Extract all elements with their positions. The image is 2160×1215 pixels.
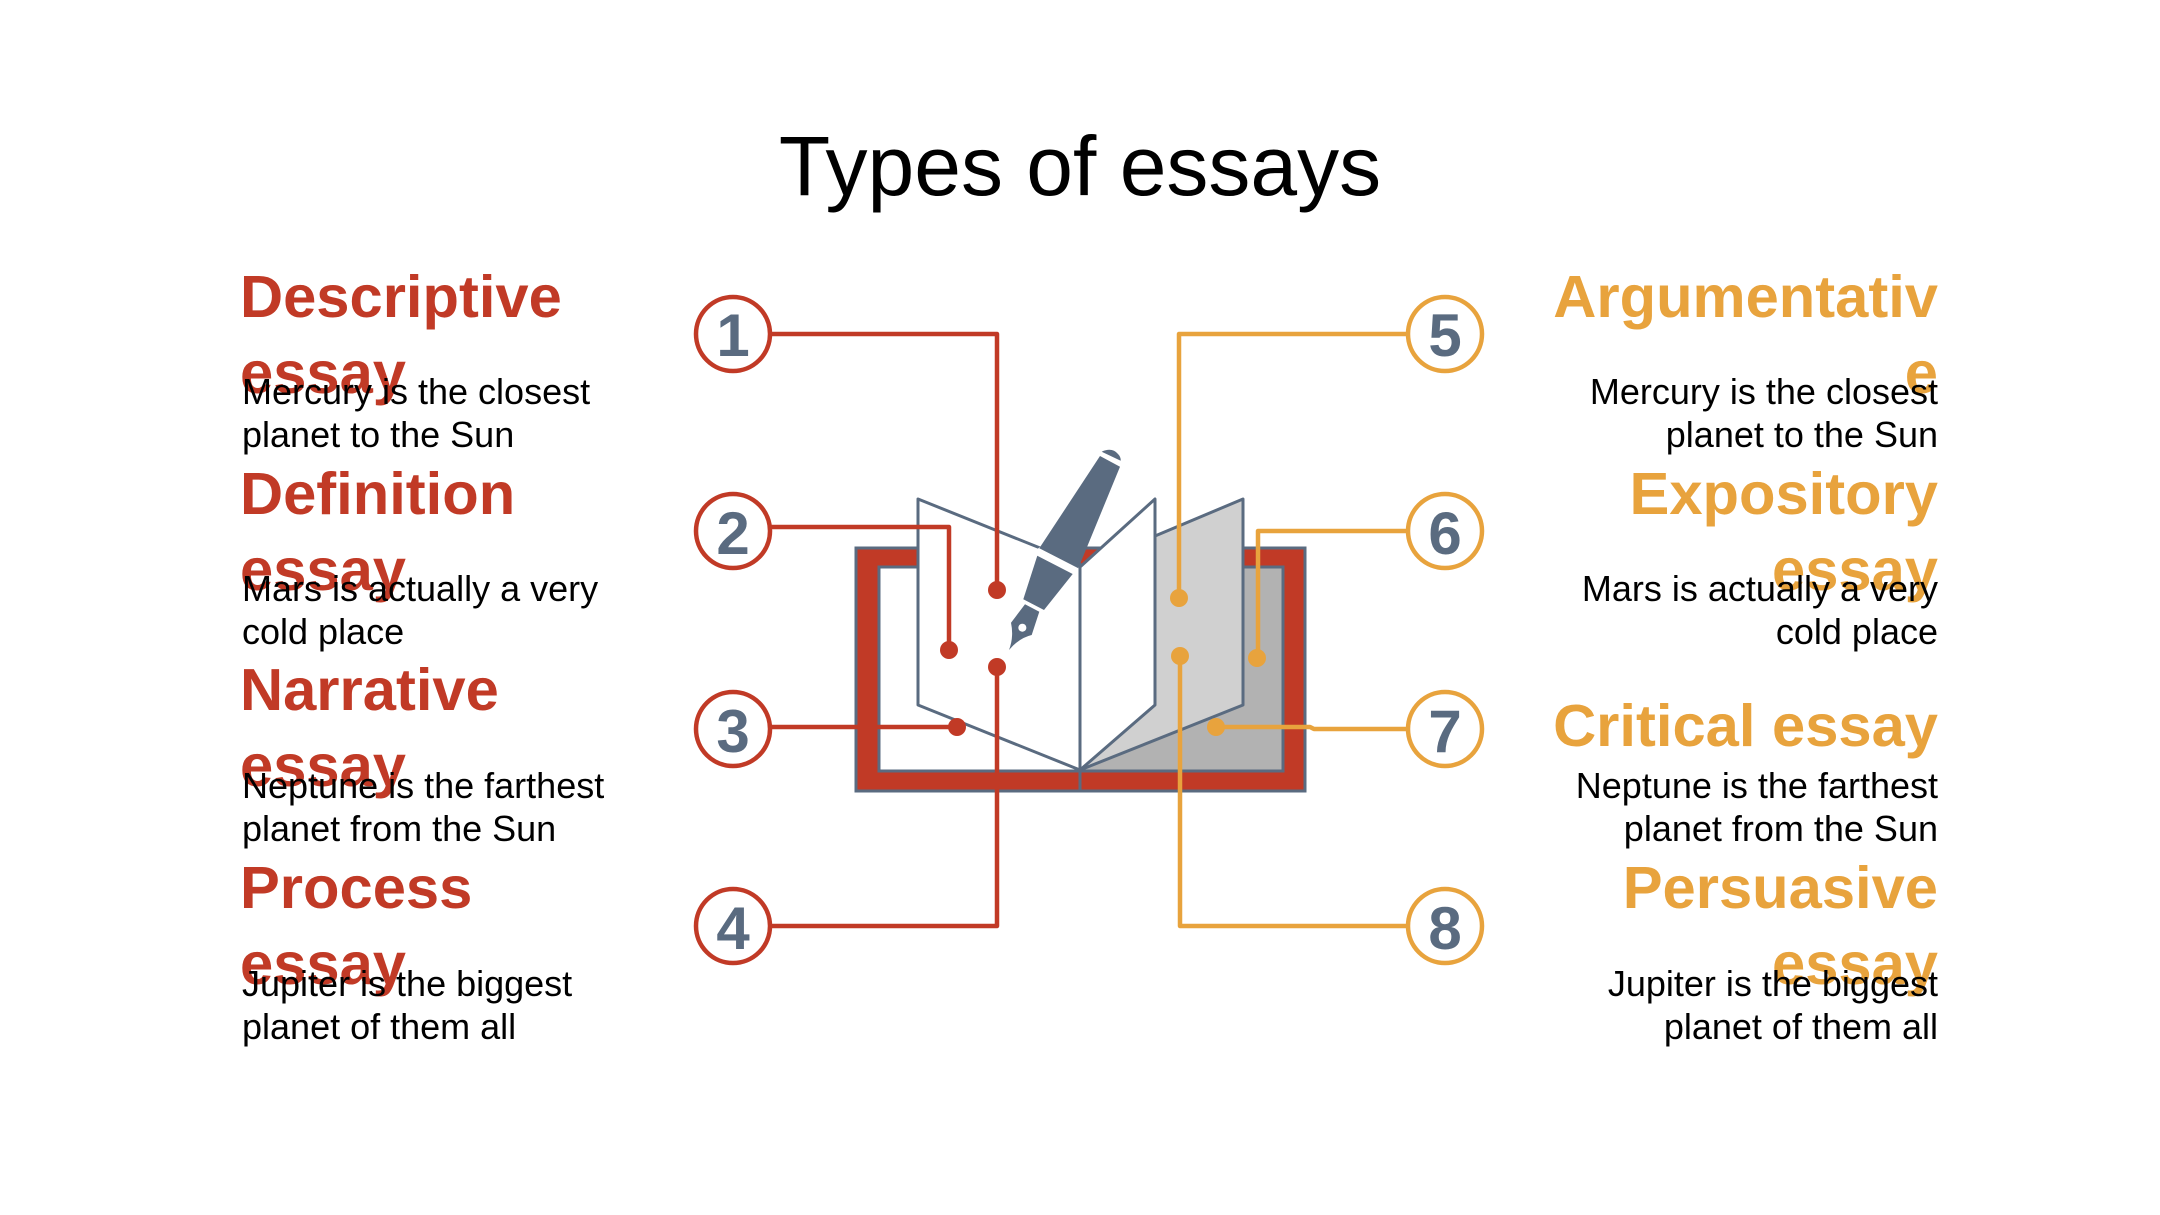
connector 8: [1171, 647, 1407, 926]
item: Persuasive essay: Jupiter is the biggest: [1608, 963, 1938, 1004]
left page: [918, 499, 1080, 770]
right page: [1080, 499, 1155, 770]
item: Narrative essay: planet from the Sun: [242, 808, 556, 849]
connectors: red: [771, 334, 1006, 926]
pen cap: [1102, 450, 1121, 461]
item: Process essay: Jupiter is the biggest: [242, 963, 572, 1004]
number badge 2: [696, 494, 770, 568]
item: Persuasive essay: [1608, 854, 1938, 1047]
number badge 6: [1408, 494, 1482, 568]
number badge 1: [696, 297, 770, 371]
illustration: open book with frame: [856, 499, 1305, 792]
number badge 6: 6: [1428, 500, 1462, 567]
number badge 3: [696, 692, 770, 766]
pen grip: [1023, 556, 1073, 610]
item: Critical essay: [1553, 692, 1938, 849]
number badge 4: [696, 889, 770, 963]
connector 6: [1248, 531, 1407, 667]
number badge 2: 2: [716, 500, 750, 567]
item: Narrative essay: Narrative: [240, 656, 499, 723]
item: Descriptive essay: Mercury is the closest: [242, 371, 590, 412]
item: Argumentative essay: Argumentativ: [1553, 263, 1938, 330]
item: Expository essay: cold place: [1776, 611, 1938, 652]
panel: right essay types: [1553, 263, 1938, 1047]
item: Argumentative essay: e: [1905, 339, 1938, 406]
item: Definition essay: cold place: [242, 611, 404, 652]
item: Narrative essay: Neptune is the farthest: [242, 765, 604, 806]
number badge 8: 8: [1428, 895, 1462, 962]
item: Descriptive essay: planet to the Sun: [242, 414, 514, 455]
item: Process essay: planet of them all: [242, 1006, 516, 1047]
back page: [1080, 499, 1243, 770]
number badge 8: [1408, 889, 1482, 963]
item: Definition essay: Definition: [240, 460, 515, 527]
pen barrel: [1039, 456, 1120, 568]
connector 4: [771, 658, 1006, 926]
connector 1: [771, 334, 1006, 599]
item: Persuasive essay: Persuasive: [1623, 854, 1938, 921]
icon: fountain pen: [1009, 450, 1121, 650]
connector 2: [771, 527, 958, 659]
number badge 4: 4: [716, 895, 750, 962]
item: Expository essay: [1582, 460, 1938, 652]
number badge 1: 1: [716, 302, 750, 369]
item: Definition essay: Mars is actually a very: [242, 568, 598, 609]
item: Argumentative essay: Mercury is the closest: [1590, 371, 1938, 412]
item: Descriptive essay: [240, 263, 590, 455]
panel: left essay types: [240, 263, 604, 1047]
item: Critical essay: planet from the Sun: [1624, 808, 1938, 849]
item: Definition essay: essay: [240, 536, 406, 603]
item: Descriptive essay: Descriptive: [240, 263, 562, 330]
number badge 3: 3: [716, 698, 750, 765]
item: Persuasive essay: essay: [1772, 930, 1938, 997]
connectors: orange: [1170, 334, 1407, 926]
number badge 7: [1408, 692, 1482, 766]
connector 3: [771, 718, 966, 736]
number badge 7: 7: [1428, 698, 1462, 765]
number badge 5: [1408, 297, 1482, 371]
connector 5: [1170, 334, 1407, 607]
item: Expository essay: Mars is actually a very: [1582, 568, 1938, 609]
item: Process essay: [240, 854, 572, 1047]
pen gap band: [1035, 547, 1079, 575]
connector 7: [1207, 718, 1407, 736]
number badge 5: 5: [1428, 302, 1462, 369]
item: Expository essay: Expository: [1630, 460, 1938, 527]
item: Process essay: essay: [240, 930, 406, 997]
item: Persuasive essay: planet of them all: [1664, 1006, 1938, 1047]
item: Definition essay: [240, 460, 598, 652]
item: Argumentative essay: planet to the Sun: [1666, 414, 1938, 455]
item: Narrative essay: [240, 656, 604, 849]
item: Critical essay: Critical essay: [1553, 692, 1938, 759]
book cover frame: [856, 548, 1305, 792]
item: Process essay: Process: [240, 854, 472, 921]
item: Expository essay: essay: [1772, 536, 1938, 603]
item: Critical essay: Neptune is the farthest: [1576, 765, 1938, 806]
item: Narrative essay: essay: [240, 732, 406, 799]
item: Argumentative essay: [1553, 263, 1938, 455]
item: Descriptive essay: essay: [240, 339, 406, 406]
pen nib: [1009, 604, 1039, 650]
title: Types of essays: [779, 119, 1381, 213]
